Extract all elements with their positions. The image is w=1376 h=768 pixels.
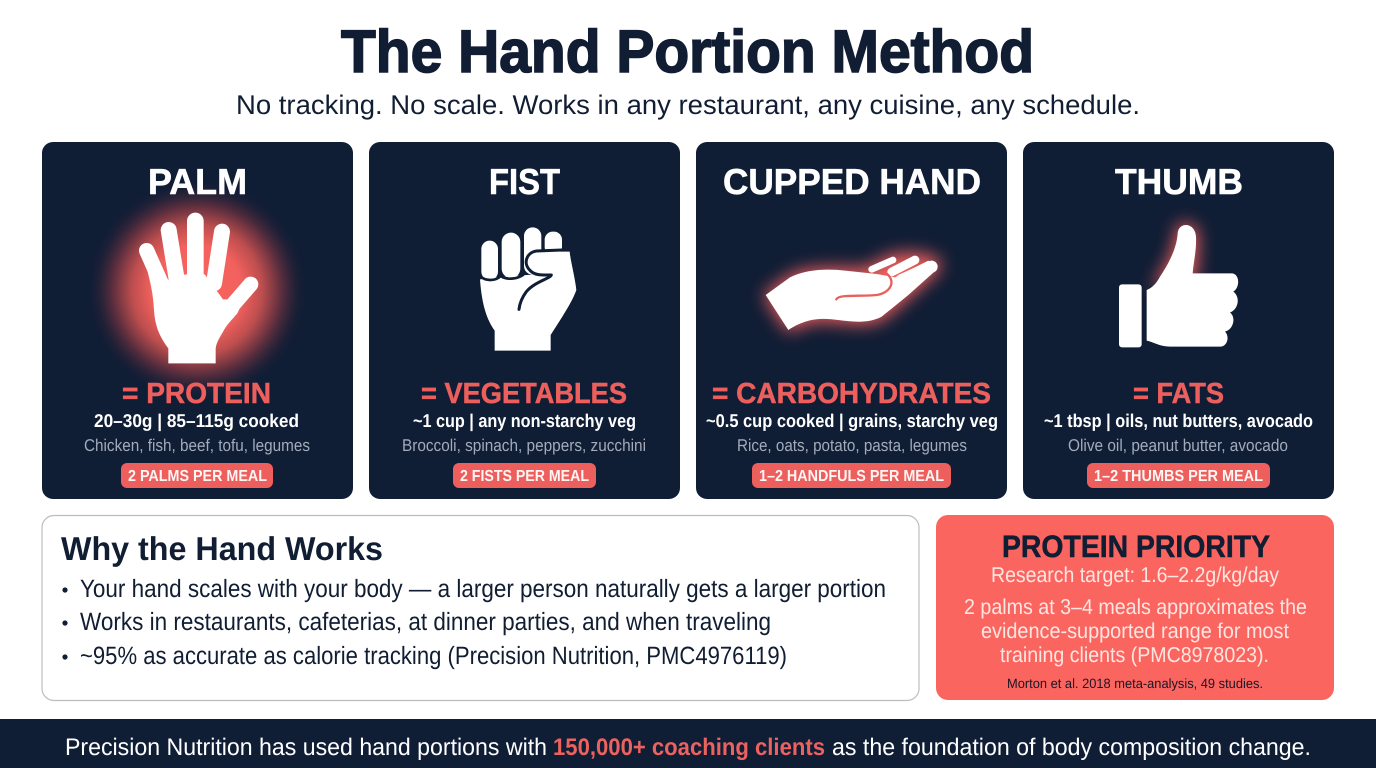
food examples: Chicken, fish, beef, tofu, legumes: [84, 436, 310, 455]
explanation: [964, 595, 1307, 667]
explanation: evidence-supported range for most: [981, 619, 1289, 643]
heading: why the hand works: Why the Hand Works: [61, 530, 383, 567]
heading: palm: PALM: [148, 161, 247, 202]
heading: thumb: THUMB: [1115, 161, 1243, 202]
subtitle: No tracking. No scale. Works in any restaurant, any cuisine, any schedule.: [236, 90, 1140, 120]
heading: protein priority: PROTEIN PRIORITY: [1002, 529, 1270, 564]
panel: thumb: [1023, 142, 1334, 499]
panel: protein priority: [936, 515, 1334, 700]
food examples: Rice, oats, potato, pasta, legumes: [737, 436, 967, 455]
food group: fats: = FATS: [1133, 378, 1224, 410]
footer banner: [0, 719, 1376, 768]
explanation: training clients (PMC8978023).: [1000, 643, 1269, 667]
icon glow: cupped hand: [763, 253, 941, 333]
bullet list: Your hand scales with your body — a larger person naturally gets a larger portion: [80, 575, 886, 603]
icon: fist: [480, 227, 576, 351]
food examples: Broccoli, spinach, peppers, zucchini: [402, 436, 646, 455]
bullet list: [62, 575, 886, 670]
food group: protein: = PROTEIN: [122, 378, 271, 410]
bullet list: ~95% as accurate as calorie tracking (Precision Nutrition, PMC4976119): [80, 642, 787, 670]
title: The Hand Portion Method: [341, 18, 1034, 85]
footer banner: Precision Nutrition has used hand portions with: [65, 734, 547, 761]
badge: per meal: [453, 463, 596, 488]
icon glow: palm: [85, 178, 309, 402]
food examples: Olive oil, peanut butter, avocado: [1068, 436, 1288, 455]
panel: why the hand works: [42, 516, 919, 700]
badge: per meal: 2 PALMS PER MEAL: [128, 468, 267, 485]
badge: per meal: 1–2 HANDFULS PER MEAL: [759, 468, 944, 485]
badge: per meal: 2 FISTS PER MEAL: [460, 468, 589, 485]
badge: per meal: [121, 463, 273, 488]
citation: Morton et al. 2018 meta-analysis, 49 studies.: [1007, 676, 1263, 691]
panel: fist: [369, 142, 680, 499]
portion detail: ~1 tbsp | oils, nut butters, avocado: [1044, 410, 1313, 432]
portion detail: 20–30g | 85–115g cooked: [94, 410, 299, 432]
panel: palm: [42, 142, 353, 499]
icon: cupped hand: [766, 260, 937, 330]
food group: carbohydrates: = CARBOHYDRATES: [712, 378, 991, 410]
badge: per meal: 1–2 THUMBS PER MEAL: [1094, 468, 1263, 485]
badge: per meal: [1087, 463, 1270, 488]
heading: cupped hand: CUPPED HAND: [723, 161, 981, 202]
icon glow: thumb: [1152, 223, 1198, 288]
badge: per meal: [752, 463, 951, 488]
icon: open hand: [146, 221, 251, 363]
food group: vegetables: = VEGETABLES: [421, 378, 627, 410]
heading: fist: FIST: [489, 161, 560, 202]
panel: cupped hand: [696, 142, 1007, 499]
bullet list: Works in restaurants, cafeterias, at dinner parties, and when traveling: [80, 608, 771, 636]
explanation: 2 palms at 3–4 meals approximates the: [964, 595, 1307, 619]
portion detail: ~0.5 cup cooked | grains, starchy veg: [706, 410, 998, 432]
portion detail: ~1 cup | any non-starchy veg: [413, 410, 636, 432]
highlight: client count: 150,000+ coaching clients: [553, 734, 825, 761]
footer banner: as the foundation of body composition change.: [832, 734, 1311, 761]
research target: Research target: 1.6–2.2g/kg/day: [991, 563, 1279, 587]
icon: thumbs up: [1119, 225, 1238, 347]
